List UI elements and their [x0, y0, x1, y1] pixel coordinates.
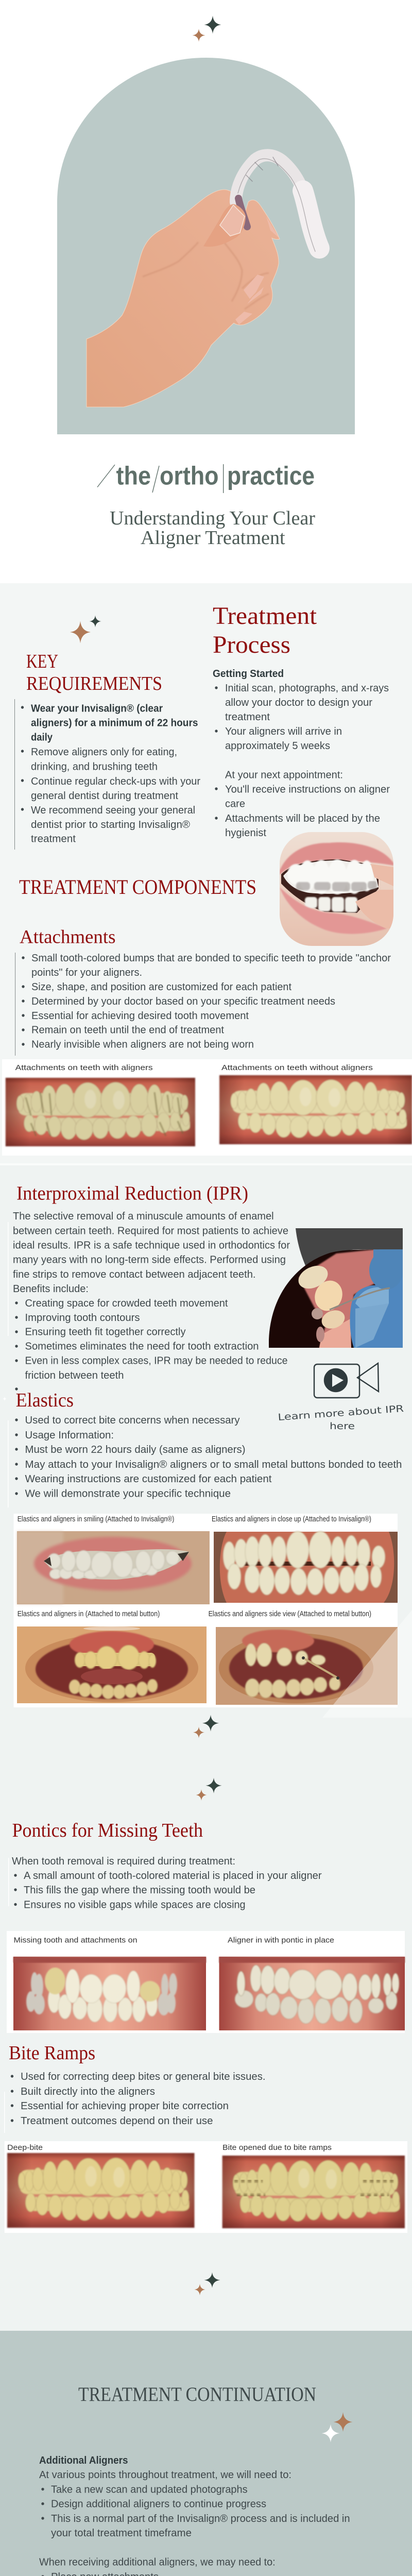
heading: key requirements: REQUIREMENTS: [26, 673, 162, 694]
text: getting started list: Initial scan, photographs, and x-rays: [225, 683, 389, 694]
text: IPR benefits list: Creating space for crowded teeth movement: [25, 1298, 228, 1309]
panel: bite ramps photos: [5, 2141, 407, 2233]
text: additional aligners: Additional Aligners: [39, 2455, 128, 2466]
heading: treatment process: [213, 602, 317, 658]
link: learn more about IPR: here: [330, 1421, 355, 1432]
link: learn more about IPR: [278, 1403, 404, 1432]
text: additional aligners: At various points throughout treatment, we will need to:: [39, 2469, 291, 2481]
caption: Bite opened due to bite ramps: [222, 2143, 332, 2152]
text: getting started list: approximately 5 weeks: [225, 740, 330, 752]
text: key requirements list: Continue regular check-ups with your: [31, 776, 200, 787]
text: getting started list: [213, 668, 390, 839]
caption: Attachments on teeth with aligners: [15, 1063, 153, 1072]
icon: sparkles: [196, 1778, 221, 1801]
photo: deep bite: [7, 2153, 195, 2228]
logo: the ortho practice: ortho: [160, 462, 218, 490]
caption: Attachments on teeth without aligners: [221, 1063, 373, 1072]
logo: the ortho practice: the: [116, 462, 151, 490]
heading: bite ramps: Bite Ramps: [9, 2042, 95, 2064]
caption: Aligner in with pontic in place: [228, 1936, 334, 1944]
text: elastics list: May attach to your Invisalign® aligners or to small metal buttons bonded to teeth: [25, 1459, 402, 1470]
text: additional aligners: This is a normal part of the Invisalign® process and is included in: [51, 2513, 350, 2524]
aligner: [236, 155, 320, 251]
text: getting started list: Your aligners will arrive in: [225, 726, 342, 737]
heading: attachments: Attachments: [20, 926, 115, 948]
photo: pontic in place: [219, 1957, 405, 2030]
text: IPR description: ideal results. IPR is a safe technique used in orthodontics for: [13, 1240, 290, 1251]
heading: pontics: Pontics for Missing Teeth: [12, 1820, 203, 1841]
heading: treatment continuation: TREATMENT CONTINUATION: [78, 2383, 316, 2405]
caption: Missing tooth and attachments on: [13, 1936, 137, 1944]
text: elastics list: Wearing instructions are customized for each patient: [25, 1473, 272, 1485]
text: IPR description: fine strips to remove contact between adjacent teeth.: [13, 1269, 255, 1280]
text: additional aligners: [39, 2455, 353, 2576]
text: pontics list: Ensures no visible gaps while spaces are closing: [24, 1899, 246, 1910]
heading: treatment components: TREATMENT COMPONENTS: [19, 875, 256, 899]
icon: sparkles: [195, 2273, 220, 2295]
caption: Elastics and aligners in (Attached to metal button): [18, 1609, 160, 1618]
heading: elastics: Elastics: [16, 1389, 74, 1411]
text: key requirements list: [21, 703, 200, 845]
photo: smile with elastics: [17, 1531, 210, 1604]
text: IPR benefits list: Ensuring teeth fit together correctly: [25, 1326, 185, 1337]
text: IPR benefits list: [15, 1298, 288, 1391]
text: elastics list: Used to correct bite concerns when necessary: [25, 1415, 239, 1426]
panel: pontics photos: [7, 1931, 405, 2033]
thumb: [203, 204, 246, 247]
text: key requirements list: treatment: [31, 834, 76, 845]
caption: Elastics and aligners in close up (Attached to Invisalign®): [212, 1515, 371, 1523]
text: pontics list: [12, 1856, 322, 1910]
text: bite ramps list: [11, 2071, 266, 2127]
link: learn more about IPR: Learn more about IPR: [278, 1403, 404, 1423]
text: getting started list: hygienist: [225, 827, 266, 839]
title: Aligner Treatment: [141, 527, 285, 549]
caption: Elastics and aligners in smiling (Attached to Invisalign®): [18, 1515, 174, 1523]
text: key requirements list: daily: [31, 732, 53, 743]
icon: video camera: [314, 1363, 379, 1398]
illustration: hand holding aligner: [87, 155, 320, 407]
icon: sparkles top: [193, 15, 221, 42]
text: attachments list: Size, shape, and position are customized for each patient: [31, 981, 291, 993]
panel: treatment continuation: [0, 2331, 412, 2576]
heading: treatment process: Treatment: [213, 602, 317, 630]
text: attachments list: points" for your aligners.: [31, 967, 142, 978]
text: key requirements list: general dentist during treatment: [31, 790, 178, 802]
text: attachments list: Remain on teeth until the end of treatment: [31, 1025, 224, 1036]
text: getting started list: allow your doctor to design your: [225, 697, 372, 708]
text: getting started list: Attachments will be placed by the: [225, 813, 380, 824]
heading: treatment process: Process: [213, 631, 290, 658]
photo: retractor side view: [216, 1627, 398, 1705]
finger nails: [235, 216, 279, 325]
panel: attachment photos: [2, 1059, 412, 1156]
text: elastics list: [15, 1415, 402, 1500]
text: IPR description: [13, 1211, 290, 1295]
text: key requirements list: drinking, and brushing teeth: [31, 761, 158, 773]
text: elastics list: Must be worn 22 hours daily (same as aligners): [25, 1444, 245, 1455]
text: key requirements list: dentist prior to starting Invisalign®: [31, 819, 190, 831]
text: elastics list: Usage Information:: [25, 1430, 114, 1441]
logo: the ortho practice: practice: [227, 462, 315, 490]
title: [110, 507, 315, 549]
photo: close up with elastics: [214, 1531, 398, 1603]
icon: sparkles: [193, 1715, 219, 1738]
photo: bite opened: [222, 2156, 405, 2228]
text: getting started list: Getting Started: [213, 668, 284, 680]
text: IPR description: The selective removal of a minuscule amounts of enamel: [13, 1211, 274, 1222]
text: pontics list: This fills the gap where the missing tooth would be: [24, 1885, 255, 1896]
text: attachments list: Determined by your doctor based on your specific treatment needs: [31, 996, 335, 1007]
text: IPR description: many years with no long-term side effects. Performed using: [13, 1255, 286, 1266]
text: bite ramps list: Treatment outcomes depend on their use: [21, 2115, 213, 2127]
text: additional aligners: Design additional aligners to continue progress: [51, 2499, 266, 2510]
panel: pontics and bite ramps: [4, 1778, 407, 2295]
photo: aligner on teeth: [280, 832, 393, 946]
text: additional aligners: Take a new scan and updated photographs: [51, 2484, 248, 2496]
photo: retractor front view: [17, 1626, 207, 1703]
caption: Elastics and aligners side view (Attached to metal button): [209, 1609, 371, 1618]
text: key requirements list: Remove aligners only for eating,: [31, 747, 177, 758]
text: IPR description: between certain teeth. Required for most patients to achieve: [13, 1225, 288, 1236]
text: IPR benefits list: Improving tooth contours: [25, 1312, 140, 1324]
arch background: [57, 58, 355, 434]
panel: hero: [0, 0, 412, 583]
heading: IPR: Interproximal Reduction (IPR): [16, 1183, 248, 1205]
photo: teeth with aligners: [6, 1078, 195, 1146]
text: bite ramps list: Used for correcting deep bites or general bite issues.: [21, 2071, 266, 2082]
text: bite ramps list: Built directly into the aligners: [21, 2086, 155, 2097]
text: getting started list: treatment: [225, 711, 270, 723]
text: pontics list: When tooth removal is required during treatment:: [12, 1856, 235, 1867]
text: attachments list: Nearly invisible when aligners are not being worn: [31, 1039, 254, 1050]
text: getting started list: At your next appointment:: [225, 770, 343, 781]
translucent corner shape: [322, 1610, 412, 1718]
logo: the ortho practice: [97, 462, 315, 493]
text: getting started list: You'll receive instructions on aligner: [225, 784, 390, 795]
heading: key requirements: [26, 651, 162, 694]
photo: teeth without aligners: [219, 1075, 412, 1144]
text: key requirements list: aligners) for a minimum of 22 hours: [31, 718, 198, 729]
text: IPR description: Benefits include:: [13, 1283, 89, 1295]
panel: elastics photos: [13, 1514, 398, 1707]
text: bite ramps list: Essential for achieving proper bite correction: [21, 2100, 229, 2112]
text: additional aligners: your total treatment timeframe: [51, 2528, 192, 2539]
text: key requirements list: We recommend seeing your general: [31, 805, 195, 816]
photo: missing tooth: [13, 1957, 206, 2030]
text: attachments list: Small tooth-colored bumps that are bonded to specific teeth to provide "anchor: [31, 953, 391, 964]
text: IPR benefits list: Sometimes eliminates the need for tooth extraction: [25, 1341, 259, 1352]
panel: IPR and elastics: [0, 1165, 412, 2331]
text: key requirements list: Wear your Invisalign® (clear: [31, 703, 163, 714]
panel: requirements and process: [0, 583, 412, 1165]
caption: Deep-bite: [7, 2143, 43, 2152]
text: attachments list: [22, 953, 391, 1050]
text: elastics list: We will demonstrate your specific technique: [25, 1488, 231, 1500]
photo: IPR strip with dark frame: [268, 1228, 404, 1349]
title: Understanding Your Clear: [110, 507, 315, 529]
text: additional aligners: When receiving additional aligners, we may need to:: [39, 2557, 276, 2568]
heading: key requirements: KEY: [26, 651, 58, 672]
text: attachments list: Essential for achieving desired tooth movement: [31, 1010, 249, 1022]
text: IPR benefits list: friction between teeth: [25, 1370, 124, 1381]
icon: sparkles: [70, 615, 101, 643]
text: pontics list: A small amount of tooth-colored material is placed in your aligner: [24, 1870, 322, 1882]
text: getting started list: care: [225, 799, 245, 810]
icon: sparkles: [321, 2412, 352, 2442]
text: IPR benefits list: Even in less complex cases, IPR may be needed to reduce: [25, 1355, 287, 1367]
